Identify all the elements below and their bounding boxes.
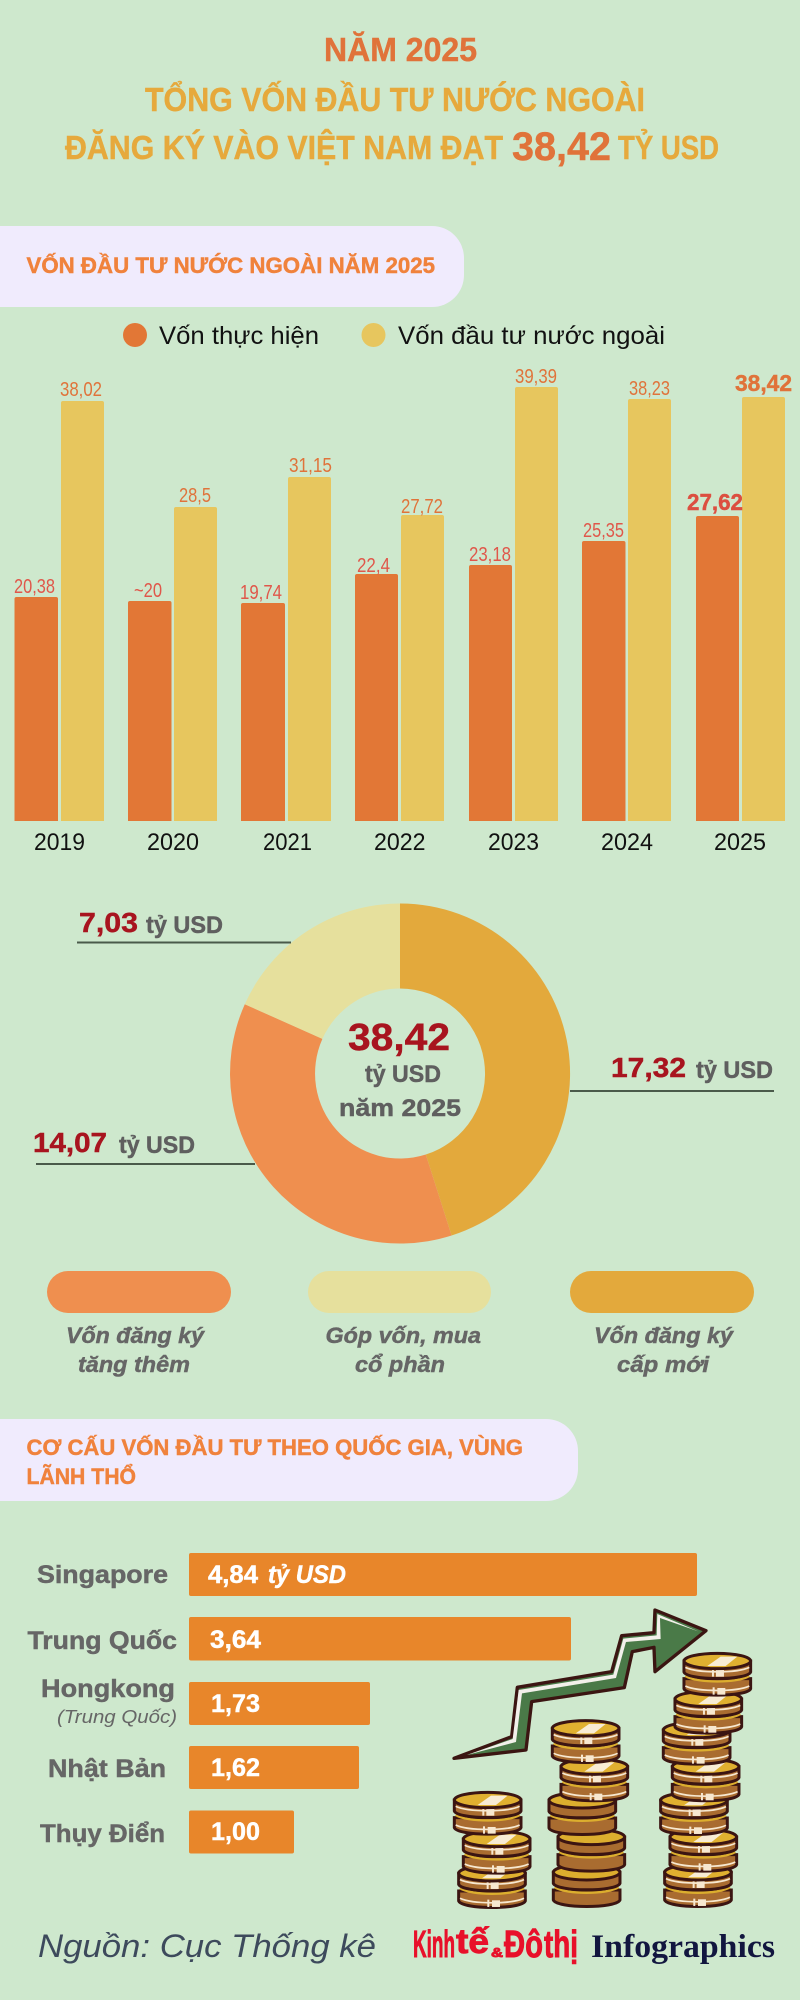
icon: coin stack left [454, 1792, 530, 1907]
row: Hongkong: Hongkong [41, 1675, 175, 1703]
bars 2022: 27,72 [401, 496, 443, 518]
row: Thụy Điển [40, 1810, 294, 1854]
title: ĐĂNG KÝ VÀO VIỆT NAM ĐẠT [65, 129, 503, 166]
callout: 14,07 [33, 1127, 255, 1165]
bars 2019: 20,38 [14, 576, 55, 598]
bar chart: country ranking [28, 1553, 697, 1854]
icon: rising arrow [454, 1610, 706, 1758]
donut legend: capital contribution [308, 1271, 491, 1377]
bars 2021: 2021 [263, 829, 312, 856]
callout: 7,03 [77, 907, 291, 944]
panel heading: capital structure by country: CƠ CẤU VỐN ĐẦU TƯ THEO QUỐC GIA, VÙNG [26, 1434, 523, 1460]
bars 2024 [582, 378, 671, 856]
bars 2021: 31,15 [289, 455, 332, 477]
row: Nhật Bản: Nhật Bản [48, 1755, 166, 1783]
donut centre text [339, 1017, 461, 1122]
bars 2020: ~20 [134, 580, 162, 602]
callout: 14,07: 14,07 [33, 1127, 107, 1158]
panel heading: capital structure by country: LÃNH THỔ [26, 1464, 136, 1489]
bars 2019: 38,02 [60, 379, 102, 401]
icon: coin stack right [661, 1653, 751, 1906]
title: TỔNG VỐN ĐẦU TƯ NƯỚC NGOÀI [145, 80, 645, 118]
bars 2023: 2023 [488, 829, 539, 856]
row: Trung Quốc: Trung Quốc [28, 1627, 177, 1655]
bars 2020: 28,5 [179, 485, 211, 507]
bars 2020 [128, 485, 217, 856]
source note: Nguồn: Cục Thống kê [38, 1928, 376, 1964]
row: Hongkong: 1,73 [211, 1690, 260, 1718]
bars 2025: 2025 [714, 829, 766, 856]
bars 2020: 2020 [147, 829, 199, 856]
bars 2023: 23,18 [469, 544, 511, 566]
bars 2019: 2019 [34, 829, 85, 856]
donut legend: additional capital: tăng thêm [78, 1352, 190, 1377]
slice: newly registered [400, 904, 570, 1236]
bars 2019 [14, 379, 104, 856]
logo: Kinh tế & Đô thị Infographics: thị [544, 1924, 578, 1966]
row: Singapore: tỷ USD [268, 1561, 346, 1589]
bars 2022: 22,4 [357, 555, 390, 577]
logo: Kinh tế & Đô thị Infographics: Kinh [413, 1924, 455, 1966]
callout: 17,32: 17,32 [611, 1052, 686, 1083]
row: Trung Quốc: 3,64 [210, 1626, 261, 1654]
bars 2022: 2022 [374, 829, 426, 856]
slice: additional capital [230, 1004, 452, 1244]
row: Trung Quốc [28, 1617, 571, 1660]
donut legend: capital contribution: Góp vốn, mua [326, 1323, 481, 1348]
logo: Kinh tế & Đô thị Infographics: Đô [504, 1924, 543, 1966]
bars 2024: 38,23 [629, 378, 670, 400]
title [65, 31, 719, 169]
row: Nhật Bản [48, 1746, 359, 1789]
logo: Kinh tế & Đô thị Infographics: tế [456, 1923, 489, 1961]
bars 2021: 19,74 [240, 582, 282, 604]
bars 2024: 2024 [601, 829, 653, 856]
slice: capital contribution [245, 904, 400, 1039]
donut legend: additional capital: Vốn đăng ký [66, 1323, 206, 1348]
bars 2023: 39,39 [515, 366, 557, 388]
row: Singapore: 4,84 [208, 1561, 258, 1589]
chart legend [123, 322, 665, 350]
panel heading: capital structure by country [0, 1419, 578, 1501]
donut legend: newly registered [570, 1271, 754, 1377]
donut centre text: tỷ USD [365, 1061, 441, 1088]
bars 2021 [240, 455, 332, 856]
donut centre text: 38,42 [348, 1017, 450, 1059]
callout: 7,03: 7,03 [79, 907, 138, 938]
title: TỶ USD [618, 129, 719, 166]
bars 2023 [469, 366, 558, 856]
donut legend: additional capital [47, 1271, 231, 1377]
row: Hongkong: (Trung Quốc) [57, 1707, 177, 1727]
bars 2025 [687, 370, 792, 856]
donut legend: capital contribution: cổ phần [355, 1352, 445, 1377]
row: Nhật Bản: 1,62 [211, 1754, 260, 1782]
callout: 14,07: tỷ USD [119, 1132, 195, 1159]
chart legend: Vốn thực hiện [159, 322, 319, 350]
donut legend: newly registered: Vốn đăng ký [594, 1323, 735, 1348]
callout: 17,32: tỷ USD [696, 1057, 773, 1084]
row: Thụy Điển: Thụy Điển [40, 1820, 165, 1848]
logo: Kinh tế & Đô thị Infographics: Infographics [591, 1929, 775, 1965]
title: 38,42 [512, 125, 611, 169]
row: Thụy Điển: 1,00 [211, 1818, 260, 1846]
donut centre text: năm 2025 [339, 1095, 461, 1122]
illustration: coin stacks and rising arrow [454, 1610, 751, 1907]
row: Singapore [37, 1553, 697, 1596]
chart legend: Vốn đầu tư nước ngoài [398, 322, 665, 350]
callout: 17,32 [570, 1052, 774, 1092]
callout: 7,03: tỷ USD [146, 912, 223, 939]
row: Hongkong [41, 1675, 370, 1727]
bars 2025: 38,42 [735, 370, 792, 396]
logo: Kinh tế & Đô thị Infographics [413, 1923, 775, 1966]
icon: coin stack middle [549, 1721, 628, 1906]
logo: Kinh tế & Đô thị Infographics: & [491, 1945, 503, 1960]
bars 2022 [355, 496, 444, 856]
bars 2024: 25,35 [583, 520, 624, 542]
bar chart: yearly capital [14, 366, 792, 856]
bars 2025: 27,62 [687, 489, 743, 515]
donut legend: newly registered: cấp mới [617, 1352, 710, 1377]
donut chart [230, 904, 570, 1244]
title: NĂM 2025 [324, 31, 477, 68]
panel heading: foreign investment 2025 [0, 226, 464, 307]
row: Singapore: Singapore [37, 1561, 168, 1589]
panel heading: foreign investment 2025: VỐN ĐẦU TƯ NƯỚC NGOÀI NĂM 2025 [26, 252, 435, 278]
